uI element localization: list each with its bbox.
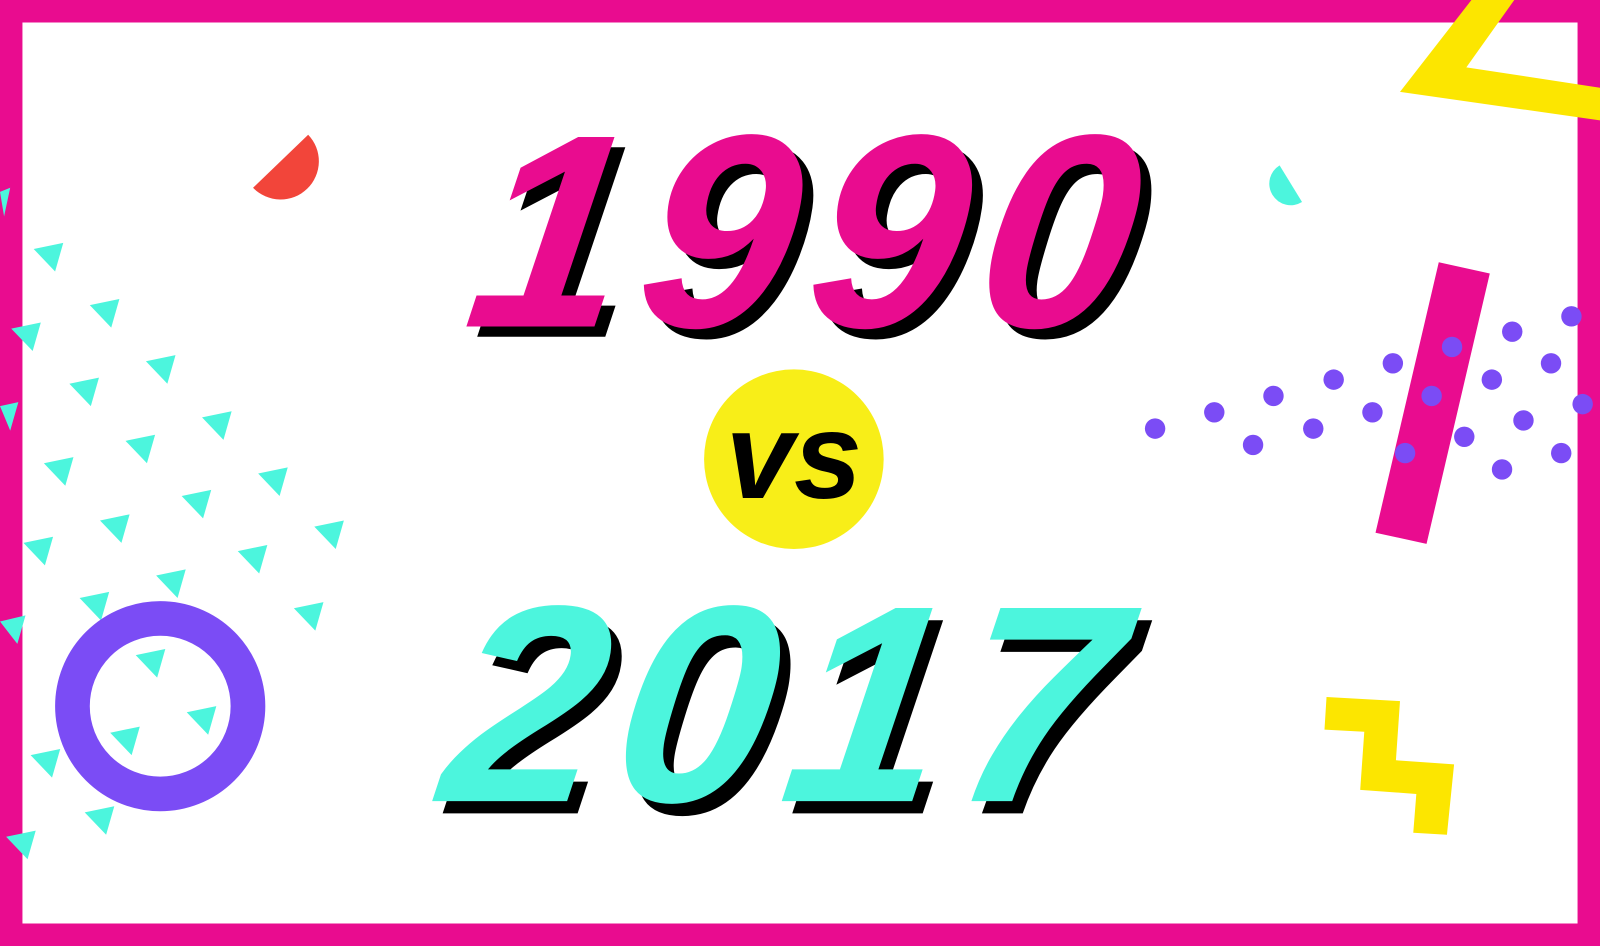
heading: 1990: 1990 [454,77,1175,385]
heading: 2017: 2017 [434,560,1165,873]
shape: cyan small half circle [1269,165,1302,205]
heading: 2017: 2017 [424,547,1154,861]
pattern: cyan triangles [0,188,344,859]
badge: vs circle: vs [726,387,862,524]
shape: yellow angle top right [1400,0,1600,120]
shape: red half circle [253,135,319,199]
shape: purple ring [72,618,248,794]
badge: vs circle [704,369,884,549]
heading: 1990: 1990 [465,87,1186,395]
shape: yellow zigzag [1324,697,1454,835]
shape: pink bar [1376,262,1490,544]
pattern: purple dots [1145,306,1593,480]
